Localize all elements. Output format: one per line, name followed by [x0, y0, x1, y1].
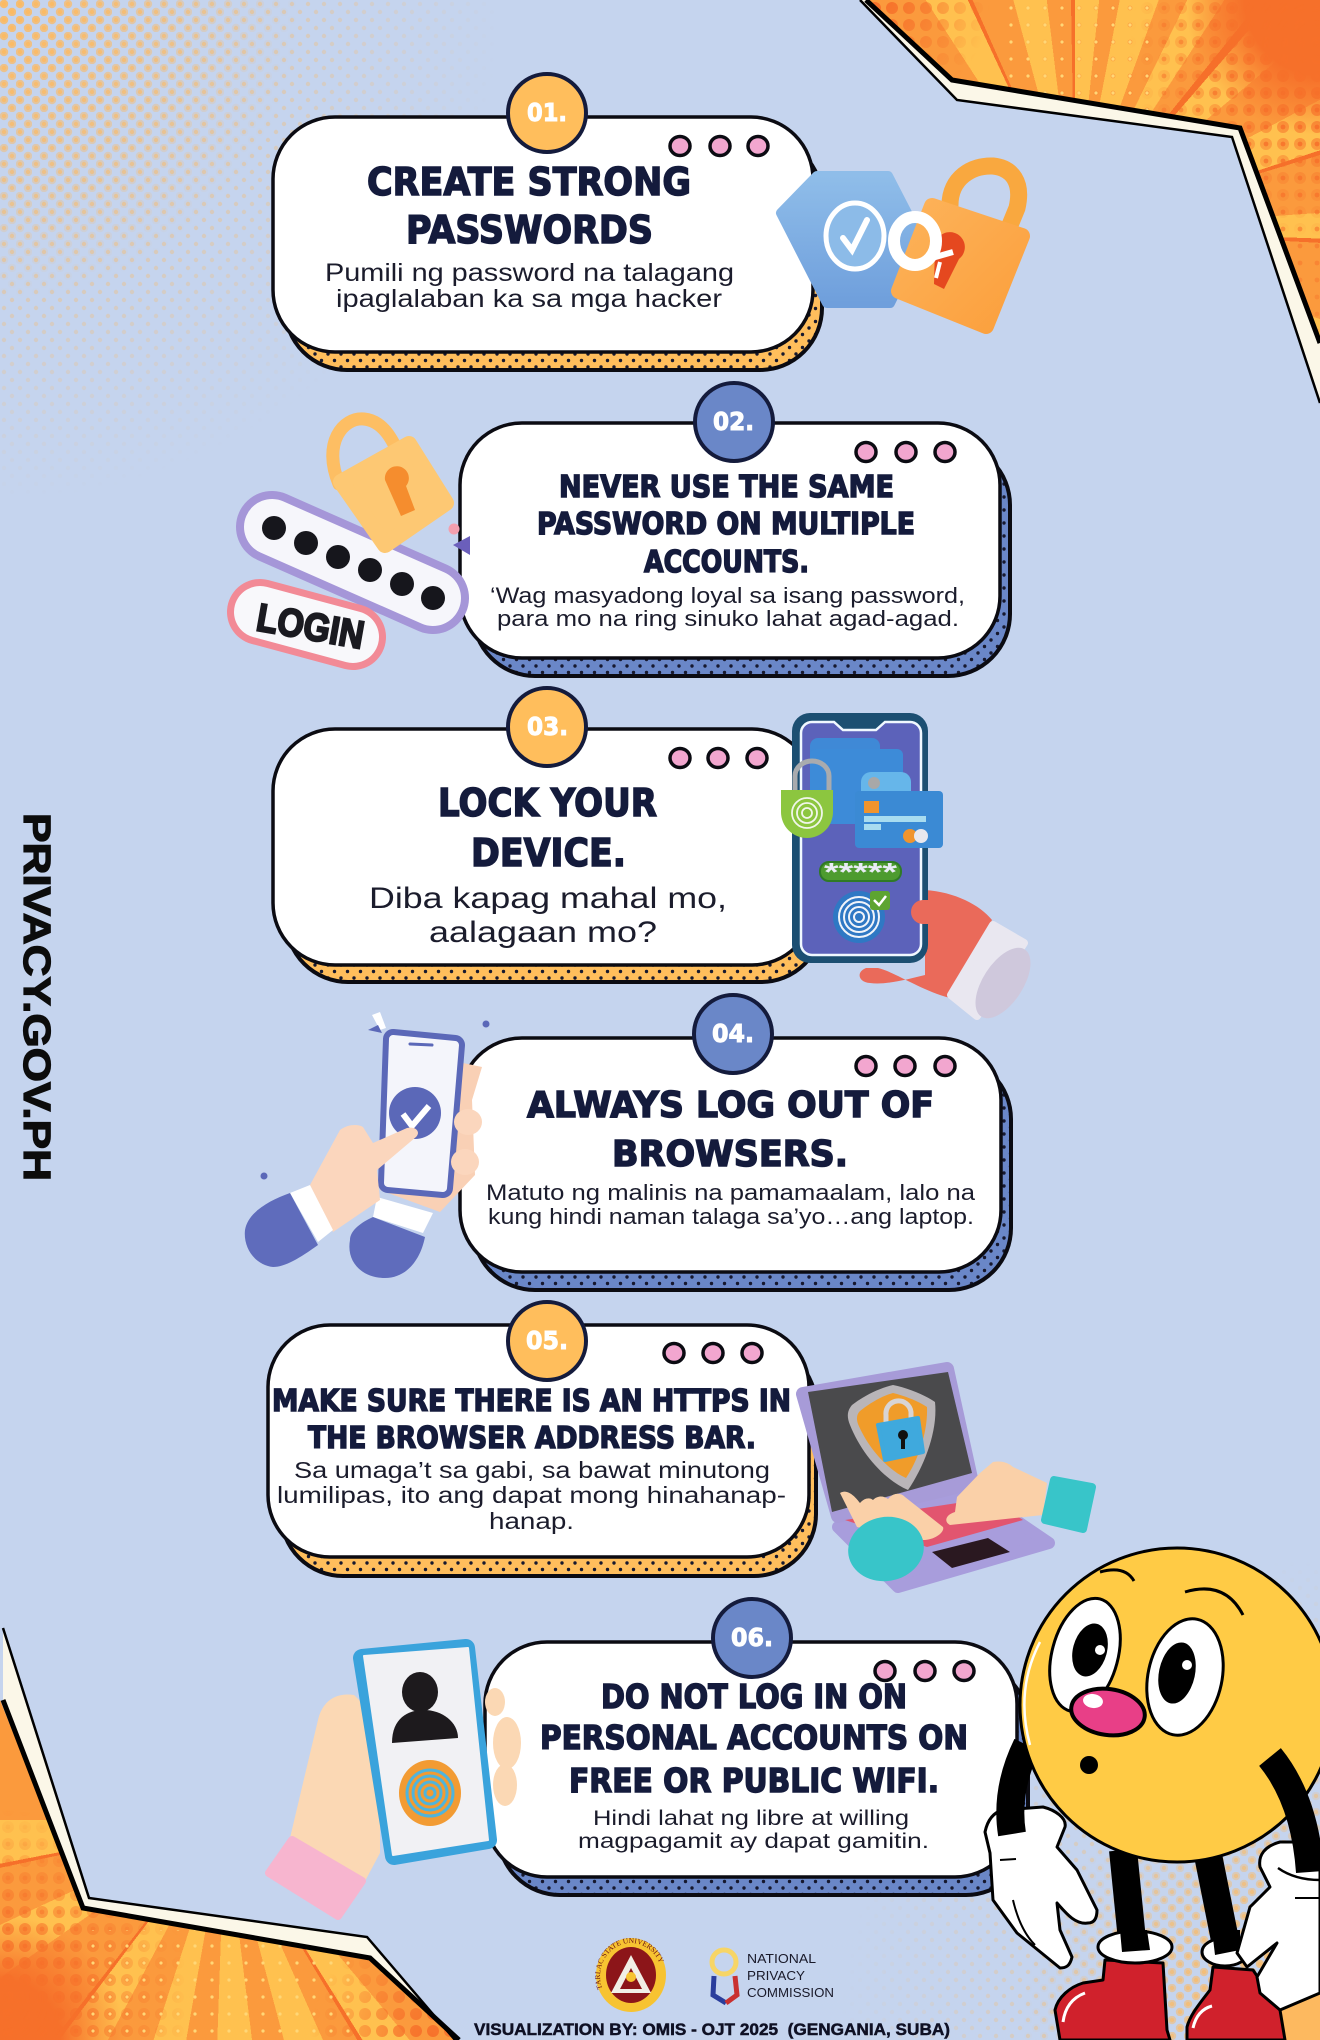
heading: ACCOUNTS. [644, 545, 809, 580]
body text: Pumili ng password na talagang [325, 259, 734, 287]
logo: National Privacy Commission: PRIVACY [747, 1968, 805, 1983]
comic burst: top right corner [870, 0, 1320, 336]
mascot mouth and brows [1024, 1570, 1243, 1774]
window dots [856, 442, 955, 462]
logo: National Privacy Commission: NATIONAL [747, 1951, 816, 1966]
mascot left glove [985, 1807, 1097, 1968]
badge 05: 05. [526, 1326, 568, 1355]
heading: PERSONAL ACCOUNTS ON [540, 1718, 968, 1757]
heading: ALWAYS LOG OUT OF [527, 1085, 934, 1126]
body text: para mo na ring sinuko lahat agad-agad. [497, 606, 959, 631]
window dots [856, 1056, 955, 1076]
body text: aalagaan mo? [429, 916, 657, 949]
badge 06 [713, 1599, 791, 1677]
panel: tip 4 [460, 995, 1011, 1290]
mascot right arm [1270, 1757, 1310, 1872]
panel: tip 3 [273, 688, 823, 982]
mascot boots [1055, 1930, 1285, 2040]
heading: FREE OR PUBLIC WIFI. [569, 1761, 939, 1800]
mascot eyes [1038, 1590, 1233, 1742]
mascot right glove [1237, 1842, 1320, 2010]
logo: Tarlac State University seal [595, 1938, 666, 2012]
burst dots: top right [872, 2, 1320, 332]
body text: magpagamit ay dapat gamitin. [578, 1830, 929, 1853]
badge 02: 02. [713, 407, 754, 436]
body text: ipaglalaban ka sa mga hacker [336, 285, 722, 313]
badge 03: 03. [527, 712, 568, 741]
mascot head [1020, 1548, 1320, 1862]
badge 02 [695, 383, 773, 461]
footer credit: VISUALIZATION BY: OMIS - OJT 2025 (GENGANIA, SUBA) [474, 2020, 950, 2039]
panel: tip 2 [460, 383, 1010, 676]
body text: Hindi lahat ng libre at willing [593, 1807, 909, 1830]
icon: hands tapping phone [245, 1012, 490, 1278]
side label: PRIVACY.GOV.PH [15, 813, 57, 1181]
heading: CREATE STRONG [367, 160, 691, 204]
badge 05 [508, 1302, 586, 1380]
heading: DO NOT LOG IN ON [601, 1677, 907, 1716]
body text: ‘Wag masyadong loyal sa isang password, [490, 583, 965, 608]
heading: PASSWORDS [406, 208, 653, 252]
heading: THE BROWSER ADDRESS BAR. [308, 1421, 756, 1456]
badge 01 [508, 74, 586, 152]
heading: DEVICE. [471, 831, 626, 875]
icon: phone with wallet and fingerprint [781, 713, 1042, 1027]
icon: login, password field and padlock: LOGIN [253, 597, 367, 658]
icon: laptop with shield and typing hands [803, 1369, 1092, 1587]
mascot left arm [1010, 1745, 1027, 1834]
body text: kung hindi naman talaga sa’yo…ang laptop. [488, 1204, 974, 1229]
heading: MAKE SURE THERE IS AN HTTPS IN [272, 1384, 791, 1419]
mascot character [985, 1548, 1320, 2040]
badge 04 [694, 995, 772, 1073]
badge 06: 06. [731, 1623, 773, 1652]
panel: tip 5 [268, 1302, 816, 1576]
logo: National Privacy Commission [712, 1950, 834, 2003]
burst frame: top right [860, 0, 1320, 403]
icon: phone with wallet and fingerprint: ***** [824, 857, 898, 887]
icon: shield and padlock with key [781, 166, 1022, 326]
panel: tip 1 [273, 74, 822, 370]
icon: login, password field and padlock [253, 419, 470, 658]
window dots [670, 136, 768, 156]
window dots [670, 748, 767, 768]
badge 04: 04. [712, 1019, 754, 1048]
logo: Tarlac State University seal: TARLAC STATE UNIVERSITY [595, 1938, 664, 1990]
heading: NEVER USE THE SAME [559, 470, 894, 505]
body text: hanap. [489, 1508, 574, 1534]
window dots [664, 1344, 762, 1362]
mascot legs [1123, 1850, 1227, 1950]
panel: tip 6 [485, 1599, 1028, 1895]
body text: Matuto ng malinis na pamamaalam, lalo na [486, 1180, 976, 1205]
heading: PASSWORD ON MULTIPLE [537, 507, 915, 542]
body text: lumilipas, ito ang dapat mong hinahanap- [277, 1482, 786, 1508]
comic burst: bottom left corner [0, 1700, 454, 2040]
logo: National Privacy Commission: COMMISSION [747, 1985, 834, 2000]
icon: hand holding phone with profile and fingerprint [269, 1648, 521, 1916]
badge 03 [508, 688, 586, 766]
badge 01: 01. [527, 98, 567, 127]
window dots [875, 1662, 974, 1680]
body text: Diba kapag mahal mo, [369, 882, 727, 915]
body text: Sa umaga’t sa gabi, sa bawat minutong [294, 1457, 770, 1483]
halftone: top left corner [0, 0, 469, 469]
mascot nose [1068, 1684, 1148, 1740]
heading: BROWSERS. [612, 1134, 848, 1175]
heading: LOCK YOUR [438, 781, 657, 825]
burst frame: bottom left [3, 1628, 459, 2040]
burst dots: bottom left [2, 1824, 450, 2037]
halftone: bottom right corner [874, 1594, 1320, 2040]
